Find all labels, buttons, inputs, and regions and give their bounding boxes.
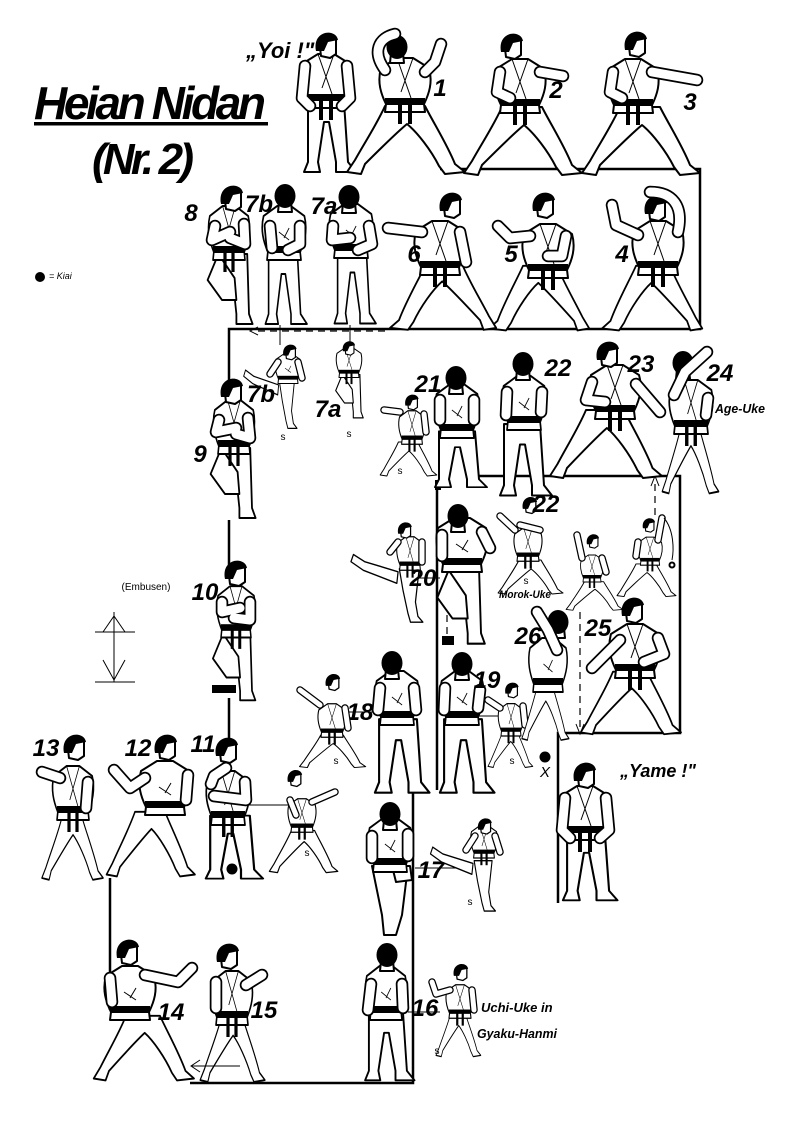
figure 20 xyxy=(436,504,490,644)
small figure 20 xyxy=(351,522,423,622)
label: yame: „Yame !" xyxy=(619,761,696,781)
number 19: 19 xyxy=(474,667,501,694)
small figure 16 xyxy=(432,964,481,1057)
embusen diagram xyxy=(95,582,170,682)
number 21: 21 xyxy=(414,371,441,398)
figure yame xyxy=(559,763,618,900)
figure 2 xyxy=(464,34,582,175)
number 23: 23 xyxy=(627,351,655,378)
figure 18 xyxy=(375,651,430,793)
figure 6 xyxy=(388,193,496,330)
caption age-uke: Age-Uke xyxy=(714,401,765,416)
number small 22: 22 xyxy=(532,491,560,518)
label: yoi: „Yoi !" xyxy=(245,38,315,63)
small figure 18 xyxy=(300,674,366,768)
number 6: 6 xyxy=(407,241,421,268)
small figure 22 xyxy=(498,497,563,594)
number 24: 24 xyxy=(706,360,733,387)
figure 25 xyxy=(581,598,681,734)
figure 17 xyxy=(368,802,412,935)
small s: s xyxy=(334,756,338,767)
small figure 19 xyxy=(488,683,533,767)
yoi figure xyxy=(300,33,356,172)
number 17: 17 xyxy=(418,857,446,884)
number 14: 14 xyxy=(158,999,184,1026)
figure 11 xyxy=(206,738,263,879)
dashed movement arrows xyxy=(245,325,659,1012)
caption uchi-uke: Uchi-Uke in xyxy=(481,1000,553,1015)
number 7b: 7b xyxy=(245,191,273,218)
number 7a: 7a xyxy=(311,193,337,220)
small figure 11 xyxy=(269,770,338,873)
number 26: 26 xyxy=(514,623,542,650)
number small 7a: 7a xyxy=(315,396,341,423)
title: (Nr. 2) xyxy=(92,135,194,184)
number 1: 1 xyxy=(433,75,447,102)
small figure 7a xyxy=(336,341,363,418)
number 11: 11 xyxy=(191,731,215,758)
figure 23 xyxy=(550,342,662,478)
embusen diagram: (Embusen) xyxy=(122,582,170,593)
figure 9 xyxy=(211,379,256,518)
number 8: 8 xyxy=(184,200,198,227)
figure 16 xyxy=(365,943,414,1080)
small s: s xyxy=(398,466,402,477)
small figure 25b xyxy=(617,518,676,597)
figure 22 xyxy=(500,352,552,495)
kiai dot and X: X xyxy=(539,764,551,781)
arrow near 15 xyxy=(191,1060,240,1072)
small s: s xyxy=(510,756,514,767)
figure 10 xyxy=(213,561,255,700)
figure 21 xyxy=(435,366,487,487)
figure 19 xyxy=(440,652,494,793)
small s: s xyxy=(304,848,310,859)
kiai legend xyxy=(35,271,73,282)
figure 1 xyxy=(347,34,465,174)
number 18: 18 xyxy=(347,699,374,726)
figure 8 xyxy=(208,186,253,324)
number 25: 25 xyxy=(584,615,612,642)
caption gyaku-hanmi: Gyaku-Hanmi xyxy=(477,1026,557,1041)
number 5: 5 xyxy=(504,241,518,268)
caption morok-uke: Morok-Uke xyxy=(499,589,551,601)
small s: s xyxy=(468,897,472,908)
figure 15 xyxy=(200,944,265,1082)
figure 4 xyxy=(602,192,702,330)
figure 12 xyxy=(106,735,195,876)
figure 14 xyxy=(94,940,194,1080)
kiai dot and X xyxy=(539,752,551,781)
embusen floor lines xyxy=(110,169,700,1083)
kiai legend: = Kiai xyxy=(49,271,73,281)
number 15: 15 xyxy=(251,997,278,1024)
small figure 7b kick xyxy=(244,345,302,428)
figure 26 xyxy=(522,610,569,740)
number 2: 2 xyxy=(548,77,563,104)
small s: s xyxy=(434,1046,440,1057)
figure 5 xyxy=(489,193,589,330)
number 4: 4 xyxy=(614,241,629,268)
number 22: 22 xyxy=(544,355,572,382)
small figure 25a xyxy=(566,534,623,610)
figure 3 xyxy=(582,32,700,175)
small s: s xyxy=(280,432,286,443)
number 12: 12 xyxy=(125,735,152,762)
number 20: 20 xyxy=(409,565,437,592)
figure 13 xyxy=(42,735,103,880)
small s: s xyxy=(346,429,352,440)
number 13: 13 xyxy=(33,735,60,762)
small figure 21 xyxy=(380,395,437,476)
figure 7b xyxy=(262,184,307,324)
number 9: 9 xyxy=(193,441,207,468)
number 10: 10 xyxy=(192,579,219,606)
small figure 17 xyxy=(430,818,500,911)
kiai dot xyxy=(226,864,238,874)
small s: s xyxy=(524,576,528,587)
number small 7b: 7b xyxy=(247,381,275,408)
number 16: 16 xyxy=(412,995,439,1022)
figure 24 xyxy=(662,351,719,493)
title xyxy=(34,77,268,184)
figure 7a xyxy=(329,185,376,323)
title: Heian Nidan xyxy=(34,77,266,129)
number 3: 3 xyxy=(683,89,697,116)
